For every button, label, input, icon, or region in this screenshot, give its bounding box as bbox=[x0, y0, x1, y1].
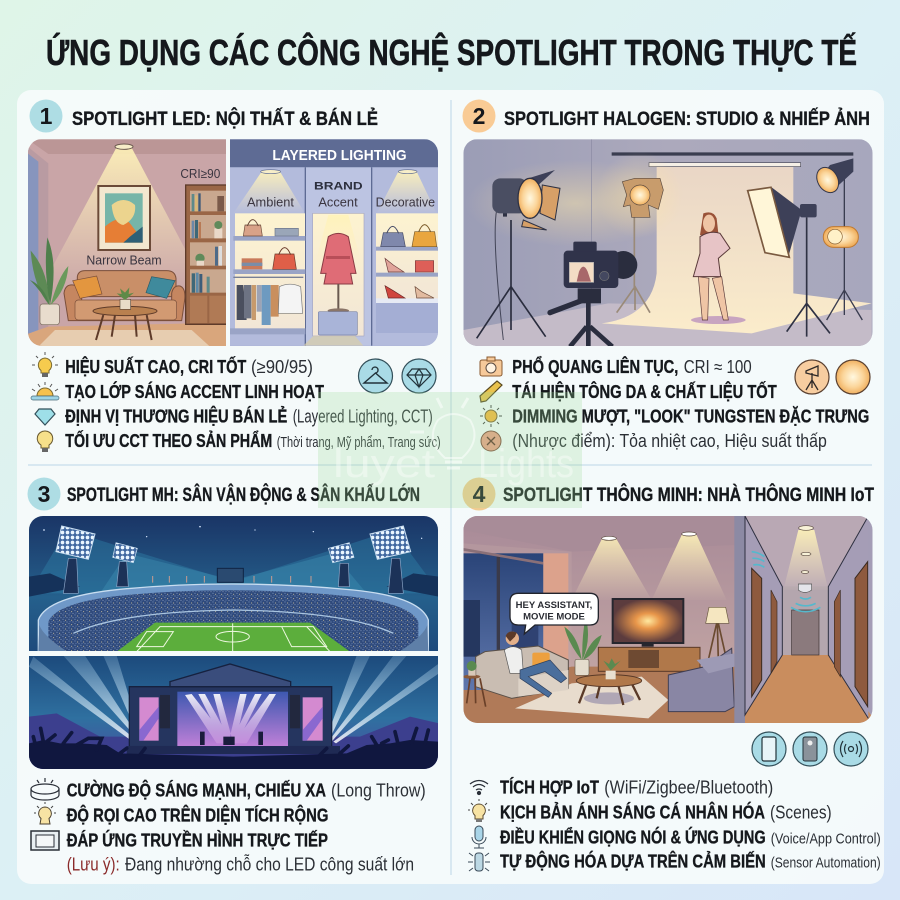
painting bbox=[98, 186, 150, 250]
illustration: retail store layered lighting bbox=[230, 139, 440, 346]
feature list: panel 2: PHỔ QUANG LIÊN TỤC, bbox=[512, 356, 678, 377]
back fresnel light bbox=[608, 160, 666, 313]
coffee table with plant bbox=[93, 287, 157, 340]
floor lamp bbox=[706, 607, 729, 660]
illustration: retail store layered lighting: BRAND bbox=[314, 180, 363, 192]
window and curtain bbox=[463, 549, 568, 690]
crowd silhouettes bbox=[29, 728, 439, 770]
icon: sunrise bbox=[31, 382, 59, 400]
plant bbox=[30, 237, 68, 325]
feature list: panel 1: TẠO LỚP SÁNG ACCENT LINH HOẠT bbox=[65, 381, 324, 402]
hallway bbox=[734, 516, 873, 725]
feature list: panel 3: Đang nhường chỗ cho LED công suất lớn bbox=[125, 854, 414, 875]
floodlight towers bbox=[56, 526, 411, 593]
camera bbox=[550, 242, 637, 347]
icon: sensor bbox=[468, 853, 490, 871]
heading: panel 3: SPOTLIGHT MH: SÂN VẬN ĐỘNG & SÂN KHẤU LỚN bbox=[67, 484, 420, 506]
icon: stadium bbox=[31, 778, 59, 800]
feature list: panel 4: TỰ ĐỘNG HÓA DỰA TRÊN CẢM BIẾN bbox=[500, 851, 766, 872]
illustration: living room with narrow beam bbox=[28, 139, 228, 347]
heading: panel 1: 1 bbox=[40, 103, 53, 129]
tv and cabinet bbox=[598, 599, 700, 671]
icon: bulb bbox=[34, 802, 56, 824]
feature list: panel 1: ĐỊNH VỊ THƯƠNG HIỆU BÁN LẺ bbox=[65, 406, 287, 427]
left shelves bbox=[230, 213, 305, 334]
icon: wireless badge bbox=[834, 732, 868, 766]
feature list: panel 3: ĐỘ RỌI CAO TRÊN DIỆN TÍCH RỘNG bbox=[67, 805, 328, 826]
icon: diamond bbox=[35, 409, 55, 425]
feature list: panel 1: (≥90/95) bbox=[251, 357, 313, 377]
panel: Spotlight Halogen bbox=[462, 100, 873, 451]
heading: panel 2 bbox=[462, 100, 870, 132]
icon: cross bbox=[481, 431, 501, 451]
illustration: concert stage with beams bbox=[29, 656, 439, 770]
heading: panel 4 bbox=[462, 478, 874, 510]
bookshelf bbox=[186, 185, 227, 324]
icon: screen frame bbox=[31, 831, 59, 850]
illustration: living room with narrow beam: CRI≥90 bbox=[180, 167, 220, 181]
feature list: panel 2 bbox=[480, 356, 869, 451]
stage structure bbox=[127, 664, 340, 754]
icon: pencil bbox=[480, 381, 502, 402]
illustration: retail store layered lighting: Ambient bbox=[247, 196, 294, 210]
feature list: panel 4: (Scenes) bbox=[770, 802, 832, 822]
banner text: LAYERED LIGHTING bbox=[272, 147, 407, 164]
center niche with coat bbox=[313, 213, 364, 336]
stadium bowl bbox=[38, 584, 428, 653]
icon: light on stand badge bbox=[795, 360, 829, 394]
feature list: panel 4: (WiFi/Zigbee/Bluetooth) bbox=[604, 777, 773, 797]
feature list: panel 3: CƯỜNG ĐỘ SÁNG MẠNH, CHIẾU XA bbox=[67, 780, 326, 801]
feature list: panel 4 bbox=[468, 776, 881, 872]
icon: speaker badge bbox=[793, 732, 827, 766]
scoreboard and flags bbox=[153, 568, 311, 583]
feature list: panel 3: (Lưu ý): bbox=[67, 855, 120, 875]
watermark: luyet bbox=[333, 442, 435, 486]
heading: panel 1: SPOTLIGHT LED: NỘI THẤT & BÁN LẺ bbox=[72, 108, 378, 130]
feature list: panel 3: (Long Throw) bbox=[331, 781, 426, 801]
heading: panel 3: 3 bbox=[38, 481, 50, 507]
side beams bbox=[29, 656, 439, 743]
heading: panel 4: 4 bbox=[473, 481, 486, 507]
heading: panel 1 bbox=[30, 100, 378, 132]
illustration: living room with narrow beam: Narrow Beam bbox=[86, 254, 162, 268]
feature list: panel 4: TÍCH HỢP IoT bbox=[500, 776, 599, 797]
feature list: panel 1: (Layered Lighting, CCT) bbox=[293, 407, 433, 427]
pitch bbox=[117, 623, 350, 652]
icon: warm glow badge bbox=[836, 360, 870, 394]
top right lamp bbox=[812, 158, 862, 320]
icon: camera bbox=[480, 357, 502, 376]
plant bbox=[564, 626, 602, 676]
icon: sun bbox=[480, 405, 502, 427]
feature list: panel 1 bbox=[31, 352, 441, 452]
watermark bbox=[318, 392, 582, 508]
backdrop bbox=[602, 154, 872, 333]
heading: panel 3 bbox=[28, 478, 420, 510]
feature list: panel 3: ĐÁP ỨNG TRUYỀN HÌNH TRỰC TIẾP bbox=[67, 830, 328, 851]
sofa bbox=[64, 271, 185, 321]
sofa with person bbox=[463, 632, 568, 707]
illustration: photo studio bbox=[463, 139, 873, 347]
icon: microphone bbox=[472, 826, 486, 848]
feature list: panel 3 bbox=[31, 778, 426, 875]
panel: Smart Spotlight bbox=[462, 478, 881, 872]
model bbox=[693, 212, 730, 320]
icon: bulb bbox=[468, 799, 490, 822]
feature list: panel 4: (Voice/App Control) bbox=[771, 830, 881, 847]
speech bubble: MOVIE MODE bbox=[523, 611, 585, 621]
feature list: panel 1: TỐI ƯU CCT THEO SẢN PHẨM bbox=[65, 430, 272, 451]
illustration: retail store layered lighting: Accent bbox=[318, 196, 358, 210]
feature list: panel 1: HIỆU SUẤT CAO, CRI TỐT bbox=[65, 356, 246, 377]
speech bubble bbox=[510, 593, 598, 634]
feature list: panel 2: (Nhược điểm): Tỏa nhiệt cao, Hiệu suất thấp bbox=[512, 431, 827, 451]
feature list: panel 1: (Thời trang, Mỹ phẩm, Trang sức) bbox=[277, 434, 441, 451]
coffee table bbox=[576, 658, 642, 705]
illustration: smart home living room and hallway bbox=[463, 516, 873, 725]
main fresnel light bbox=[477, 170, 560, 340]
panel: Spotlight MH bbox=[28, 478, 440, 875]
icon: bulb bbox=[32, 352, 58, 377]
watermark: Lights bbox=[478, 442, 574, 486]
small fresnel bbox=[823, 227, 858, 247]
feature list: panel 4: ĐIỀU KHIỂN GIỌNG NÓI & ỨNG DỤNG bbox=[500, 826, 766, 847]
feature list: panel 4: KỊCH BẢN ÁNH SÁNG CÁ NHÂN HÓA bbox=[500, 801, 765, 822]
heading: panel 2: 2 bbox=[473, 103, 485, 129]
icon: diamond badge bbox=[402, 359, 436, 393]
softbox bbox=[748, 187, 830, 337]
illustration: stadium at night bbox=[29, 516, 440, 653]
icon: bulb bbox=[37, 431, 53, 452]
armchair bbox=[668, 648, 734, 712]
speech bubble: HEY ASSISTANT, bbox=[516, 600, 592, 610]
icon: wifi bbox=[470, 780, 488, 794]
right shelves bbox=[376, 213, 439, 333]
illustration: retail store layered lighting: Decorative bbox=[376, 196, 435, 210]
panel: Spotlight LED bbox=[28, 100, 441, 452]
icon: hanger badge bbox=[358, 359, 392, 393]
icon: phone badge bbox=[752, 732, 786, 766]
feature list: panel 2: TÁI HIỆN TÔNG DA & CHẤT LIỆU TỐT bbox=[512, 381, 777, 402]
feature list: panel 2: CRI ≈ 100 bbox=[684, 357, 752, 377]
